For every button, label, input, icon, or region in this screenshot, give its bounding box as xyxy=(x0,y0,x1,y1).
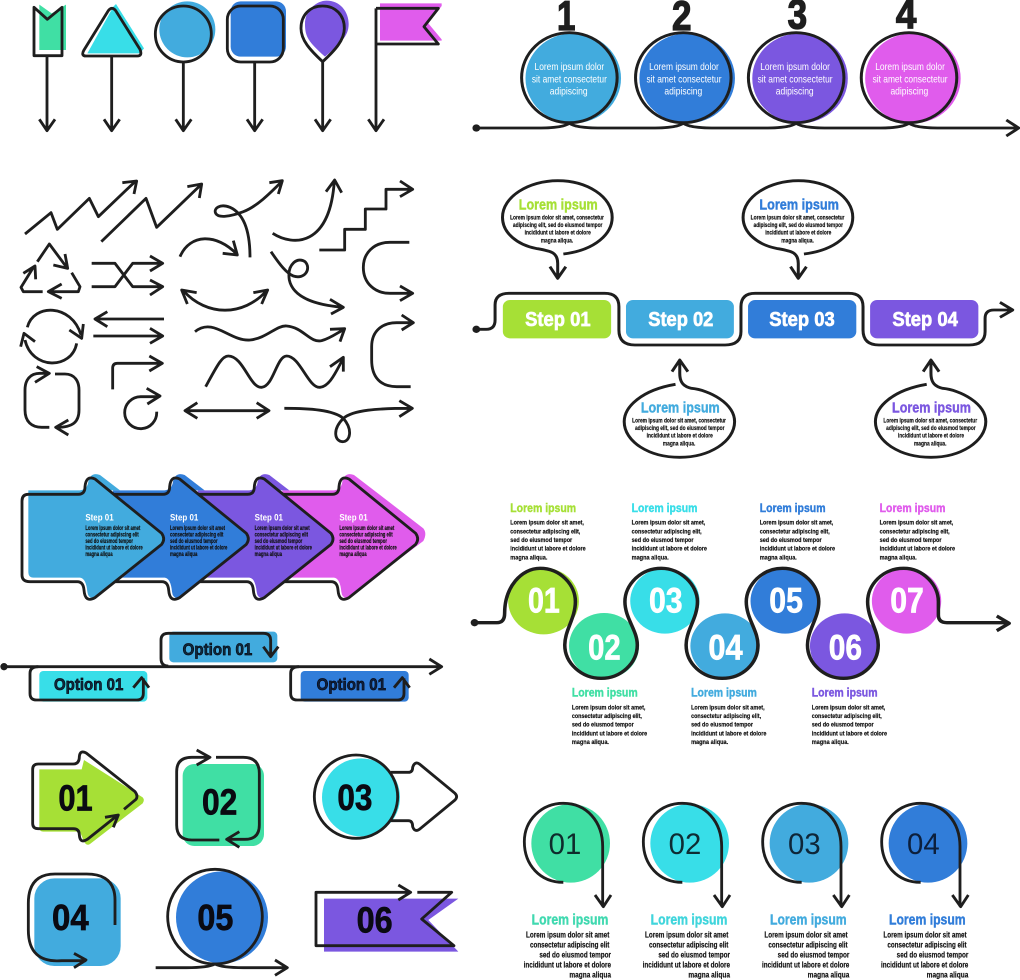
step pills: Step 03 xyxy=(769,308,835,331)
numbered circles: 03 xyxy=(649,580,683,620)
arrow: opposing pair xyxy=(93,312,164,343)
numbered circles: 02 xyxy=(588,627,621,667)
numbered circles: 06 xyxy=(829,627,862,667)
step 01 xyxy=(524,803,611,980)
step arrow 2 blue: consectetur adipiscing elit xyxy=(170,532,223,538)
bubble for step 2 xyxy=(624,360,735,457)
step 04: incididunt ut labore et dolore xyxy=(881,961,969,970)
text block 02: consectetur adipiscing elit, xyxy=(572,713,642,720)
bubble for step 4: magna aliqua. xyxy=(914,440,947,447)
text block 02: Lorem ipsum dolor sit amet, xyxy=(572,704,646,711)
circle 3: sit amet consectetur xyxy=(758,75,833,85)
step pills: Step 01 xyxy=(525,308,591,331)
arrow: bracket xyxy=(372,315,413,387)
text block 07: sed do eiusmod tempor xyxy=(880,537,942,544)
text block 02: sed do eiusmod tempor xyxy=(572,722,634,729)
circle 1: adipiscing xyxy=(550,87,588,98)
circle 3: adipiscing xyxy=(776,87,814,98)
bubble for step 4 xyxy=(875,360,986,457)
step 01: Lorem ipsum dolor sit amet xyxy=(526,931,610,940)
step 02 xyxy=(643,803,730,980)
text block 01: sed do eiusmod tempor xyxy=(510,537,573,544)
step arrow 2 blue: incididunt ut labore et dolore xyxy=(170,546,228,552)
panel: four circled steps bottom right xyxy=(524,803,969,980)
step arrow 3 purple: sed do eiusmod tempor xyxy=(255,539,303,545)
badge 03 circle arrow xyxy=(314,755,457,838)
text block 05: incididunt ut labore et dolore xyxy=(760,546,836,553)
text block 04: consectetur adipiscing elit, xyxy=(691,713,761,720)
text block 03: incididunt ut labore et dolore xyxy=(632,546,707,553)
badge 02 square xyxy=(177,750,264,847)
step 04: consectetur adipiscing elit xyxy=(887,941,967,950)
panel: step process with speech bubbles xyxy=(472,181,1013,457)
text block 03: Lorem ipsum xyxy=(632,501,697,515)
text block 07: Lorem ipsum xyxy=(880,501,945,515)
step arrow 3 purple: consectetur adipiscing elit xyxy=(255,532,308,538)
wave line xyxy=(471,568,1009,678)
step 03: magna aliqua xyxy=(808,971,850,980)
bubble for step 3: magna aliqua. xyxy=(781,237,814,244)
badge 06 ribbon xyxy=(316,885,458,952)
step 01: magna aliqua xyxy=(569,971,611,980)
panel: options timeline xyxy=(0,632,442,702)
option left cyan xyxy=(30,667,149,702)
circle 4: Lorem ipsum dolor xyxy=(875,62,945,73)
text block 02: Lorem ipsum xyxy=(572,686,638,700)
panel: top-right numbered circles timeline xyxy=(472,0,1019,136)
numbered circles: 04 xyxy=(708,627,743,667)
step 02: sed do eiusmod tempor xyxy=(658,951,730,960)
text block 07: consectetur adipiscing elit, xyxy=(880,528,950,535)
step arrow 1 sky: consectetur adipiscing elit xyxy=(85,532,139,538)
option right blue xyxy=(291,667,410,702)
text block 06: consectetur adipiscing elit, xyxy=(812,713,882,720)
icon: flag pin xyxy=(368,3,442,131)
step arrow 2 blue: Step 01 xyxy=(170,513,198,523)
step arrow 1 sky: incididunt ut labore et dolore xyxy=(85,546,143,552)
timeline arrow xyxy=(472,120,1019,136)
text block 04: sed do eiusmod tempor xyxy=(691,722,754,729)
bubble for step 2: adipiscing elit, sed do eiusmod tempor xyxy=(635,425,725,432)
bubble for step 1: incididunt ut labore et dolore xyxy=(525,230,591,237)
step pills xyxy=(503,300,978,338)
step arrow 1 sky: sed do eiusmod tempor xyxy=(85,539,133,545)
step 01: consectetur adipiscing elit xyxy=(530,941,610,950)
text block 06: Lorem ipsum xyxy=(812,686,878,700)
text block 03: sed do eiusmod tempor xyxy=(632,537,694,544)
text block 05: sed do eiusmod tempor xyxy=(760,537,822,544)
circle 2 xyxy=(636,0,735,123)
bubble for step 4: adipiscing elit, sed do eiusmod tempor xyxy=(886,425,976,432)
arrow: crossing pair xyxy=(92,256,163,295)
text block 01: consectetur adipiscing elit, xyxy=(510,528,581,535)
badge 01 arrow: 01 xyxy=(58,777,93,818)
text block 01 xyxy=(510,501,586,561)
bubble for step 4: Lorem ipsum xyxy=(892,400,971,417)
step 03 xyxy=(762,803,850,980)
text block 03: Lorem ipsum dolor sit amet, xyxy=(632,520,705,527)
step 01: Lorem ipsum xyxy=(532,912,608,928)
text block 03: consectetur adipiscing elit, xyxy=(632,528,702,535)
step 04: Lorem ipsum dolor sit amet xyxy=(883,931,967,940)
bubble for step 3: Lorem ipsum dolor sit amet, consectetur xyxy=(751,214,845,221)
numbered circles: 01 xyxy=(528,580,560,620)
circle 4 xyxy=(861,0,961,123)
numbered circles: 05 xyxy=(769,580,803,620)
circle 4: adipiscing xyxy=(890,87,929,98)
arrow: deep wave xyxy=(206,356,343,387)
bubble for step 3 xyxy=(743,181,853,278)
circle 2: Lorem ipsum dolor xyxy=(649,62,719,73)
option left cyan: Option 01 xyxy=(54,675,123,694)
step arrow 4 magenta xyxy=(276,474,425,599)
step 02: magna aliqua xyxy=(688,971,730,980)
text block 04: incididunt ut labore et dolore xyxy=(691,730,767,737)
arrow: square cycle xyxy=(25,367,79,435)
text block 07: Lorem ipsum dolor sit amet, xyxy=(880,520,953,527)
step 02: Lorem ipsum xyxy=(651,912,727,928)
panel: seven-step wave xyxy=(471,501,1009,746)
text block 01: magna aliqua. xyxy=(510,554,548,561)
step arrow 2 blue: Lorem ipsum dolor sit amet xyxy=(170,526,225,532)
bubble for step 3: Lorem ipsum xyxy=(759,197,839,213)
step 04: 04 xyxy=(907,828,940,861)
bubble for step 4: Lorem ipsum dolor sit amet, consectetur xyxy=(883,417,978,424)
badge 01 arrow xyxy=(33,752,144,845)
step arrow 4 magenta: consectetur adipiscing elit xyxy=(339,532,393,538)
bubble for step 1: Lorem ipsum xyxy=(519,197,598,213)
text block 06 xyxy=(812,686,888,746)
text block 05: Lorem ipsum dolor sit amet, xyxy=(760,520,834,527)
text block 07 xyxy=(880,501,956,561)
arrow: recycle triangle xyxy=(21,244,80,298)
circle 1: Lorem ipsum dolor xyxy=(535,62,605,73)
icon: ribbon pin xyxy=(34,5,66,131)
step arrow 1 sky xyxy=(22,474,164,599)
arrow: redo xyxy=(125,388,160,429)
step 04: Lorem ipsum xyxy=(889,912,966,928)
step arrow 3 purple: incididunt ut labore et dolore xyxy=(255,546,312,552)
text block 07: incididunt ut labore et dolore xyxy=(880,546,956,553)
panel: overlapping step arrows xyxy=(22,474,425,599)
step arrow 3 purple: magna aliqua xyxy=(255,552,282,558)
badge 04 rounded: 04 xyxy=(52,897,89,938)
circle 1 xyxy=(522,0,621,123)
step 03: 03 xyxy=(788,828,821,861)
step 02: incididunt ut labore et dolore xyxy=(643,961,730,970)
text block 07: magna aliqua. xyxy=(880,554,917,561)
circle 3: Lorem ipsum dolor xyxy=(760,62,830,73)
panel: top-left pins with arrows xyxy=(34,1,442,131)
bubble for step 1: magna aliqua. xyxy=(541,237,573,244)
step arrow 4 magenta: magna aliqua xyxy=(339,552,367,558)
bubble for step 2: Lorem ipsum dolor sit amet, consectetur xyxy=(632,417,726,424)
icon: circle pin xyxy=(155,1,215,131)
step 01: sed do eiusmod tempor xyxy=(539,951,611,960)
bubble for step 3: incididunt ut labore et dolore xyxy=(765,230,832,237)
step arrow 1 sky: Step 01 xyxy=(85,513,114,523)
panel: numbered badges xyxy=(28,750,458,975)
arrow: curve up xyxy=(273,180,342,240)
icon: triangle pin xyxy=(83,4,144,131)
text block 05: magna aliqua. xyxy=(760,554,797,561)
circle 3 xyxy=(748,0,848,123)
step 03: sed do eiusmod tempor xyxy=(778,951,849,960)
step arrow 1 sky: magna aliqua xyxy=(85,552,113,558)
arrow: loop down right xyxy=(271,252,343,314)
text block 04: Lorem ipsum dolor sit amet, xyxy=(691,704,765,711)
bubble for step 2: incididunt ut labore et dolore xyxy=(647,433,713,440)
circle 4: sit amet consectetur xyxy=(873,75,948,85)
text block 06: sed do eiusmod tempor xyxy=(812,722,874,729)
step arrow 3 purple: Step 01 xyxy=(255,513,283,523)
circle 2: adipiscing xyxy=(664,87,702,98)
text block 01: Lorem ipsum dolor sit amet, xyxy=(510,520,584,527)
badge 06 ribbon: 06 xyxy=(357,899,393,940)
text block 05: consectetur adipiscing elit, xyxy=(760,528,830,535)
step 04 xyxy=(881,803,969,980)
text block 04: magna aliqua. xyxy=(691,739,728,746)
bubble for step 4: incididunt ut labore et dolore xyxy=(898,433,964,440)
step arrow 4 magenta: incididunt ut labore et dolore xyxy=(339,546,397,552)
text block 03 xyxy=(632,501,707,561)
badge 02 square: 02 xyxy=(202,781,237,822)
text block 01: incididunt ut labore et dolore xyxy=(510,546,586,553)
bubble for step 1: Lorem ipsum dolor sit amet, consectetur xyxy=(510,214,604,221)
step 01: incididunt ut labore et dolore xyxy=(524,961,611,970)
step 03: consectetur adipiscing elit xyxy=(768,941,848,950)
numbered circles xyxy=(508,568,941,679)
step 02: consectetur adipiscing elit xyxy=(649,941,729,950)
text block 02 xyxy=(572,686,648,746)
step arrow 3 purple xyxy=(191,474,334,599)
arrow: stairs xyxy=(319,181,413,250)
step arrow 4 magenta: Lorem ipsum dolor sit amet xyxy=(339,526,394,532)
stepped connector line xyxy=(472,293,1013,345)
text block 06: incididunt ut labore et dolore xyxy=(812,730,888,737)
arrow: corner xyxy=(113,356,162,389)
arrow: curved double xyxy=(182,290,268,310)
arrow: loop up right xyxy=(215,181,282,257)
badge 05 circle: 05 xyxy=(197,897,233,938)
icon: rounded square pin xyxy=(227,1,286,131)
arrow: bottom loop xyxy=(284,401,412,442)
text block 01: Lorem ipsum xyxy=(510,501,576,515)
step arrow 1 sky: Lorem ipsum dolor sit amet xyxy=(85,526,140,532)
bubble for step 1 xyxy=(503,181,612,278)
step 03: Lorem ipsum dolor sit amet xyxy=(764,931,848,940)
option right blue: Option 01 xyxy=(317,675,386,694)
step 01: 01 xyxy=(549,828,581,861)
arrow: circular cycle xyxy=(21,310,83,363)
arrow: gentle wave xyxy=(195,326,345,342)
text block 04: Lorem ipsum xyxy=(691,686,757,700)
text block 06: Lorem ipsum dolor sit amet, xyxy=(812,704,886,711)
step arrow 4 magenta: Step 01 xyxy=(339,513,368,523)
arrow: curved right xyxy=(180,239,237,257)
step 02: Lorem ipsum dolor sit amet xyxy=(645,931,729,940)
arrow: zigzag two xyxy=(101,184,202,242)
badge 05 circle xyxy=(156,869,287,975)
step arrow 2 blue: sed do eiusmod tempor xyxy=(170,539,218,545)
step 03: Lorem ipsum xyxy=(770,912,847,928)
arrow: zigzag one xyxy=(25,181,137,234)
bubble for step 2: magna aliqua. xyxy=(663,440,696,447)
step 04: magna aliqua xyxy=(927,971,969,980)
arrow: u-turn xyxy=(363,242,413,301)
bubble for step 1: adipiscing elit, sed do eiusmod tempor xyxy=(513,222,603,229)
icon: balloon pin xyxy=(301,1,349,131)
text block 02: magna aliqua. xyxy=(572,739,609,746)
badge 04 rounded xyxy=(28,874,121,968)
text block 05 xyxy=(760,501,836,561)
option top sky xyxy=(161,632,278,666)
badge 03 circle arrow: 03 xyxy=(337,777,372,818)
text block 04 xyxy=(691,686,767,746)
step pills: Step 02 xyxy=(648,308,713,331)
step arrow 4 magenta: sed do eiusmod tempor xyxy=(339,539,387,545)
text block 06: magna aliqua. xyxy=(812,739,849,746)
step arrow 2 blue: magna aliqua xyxy=(170,552,198,558)
bubble for step 3: adipiscing elit, sed do eiusmod tempor xyxy=(754,222,844,229)
numbered circles: 07 xyxy=(890,580,924,620)
circle 2: sit amet consectetur xyxy=(646,75,722,85)
step 04: sed do eiusmod tempor xyxy=(897,951,968,960)
step 02: 02 xyxy=(669,828,701,861)
step pills: Step 04 xyxy=(892,308,958,331)
text block 02: incididunt ut labore et dolore xyxy=(572,730,648,737)
circle 1: sit amet consectetur xyxy=(532,75,607,85)
text block 03: magna aliqua. xyxy=(632,554,669,561)
panel: arrow collection xyxy=(21,180,413,442)
step arrow 2 blue xyxy=(107,474,249,599)
timeline arrow xyxy=(0,659,442,674)
bubble for step 2: Lorem ipsum xyxy=(641,400,720,417)
text block 05: Lorem ipsum xyxy=(760,501,826,515)
option top sky: Option 01 xyxy=(183,640,252,659)
step arrow 3 purple: Lorem ipsum dolor sit amet xyxy=(255,526,310,532)
step 03: incididunt ut labore et dolore xyxy=(762,961,850,970)
arrow: double headed xyxy=(185,403,269,418)
